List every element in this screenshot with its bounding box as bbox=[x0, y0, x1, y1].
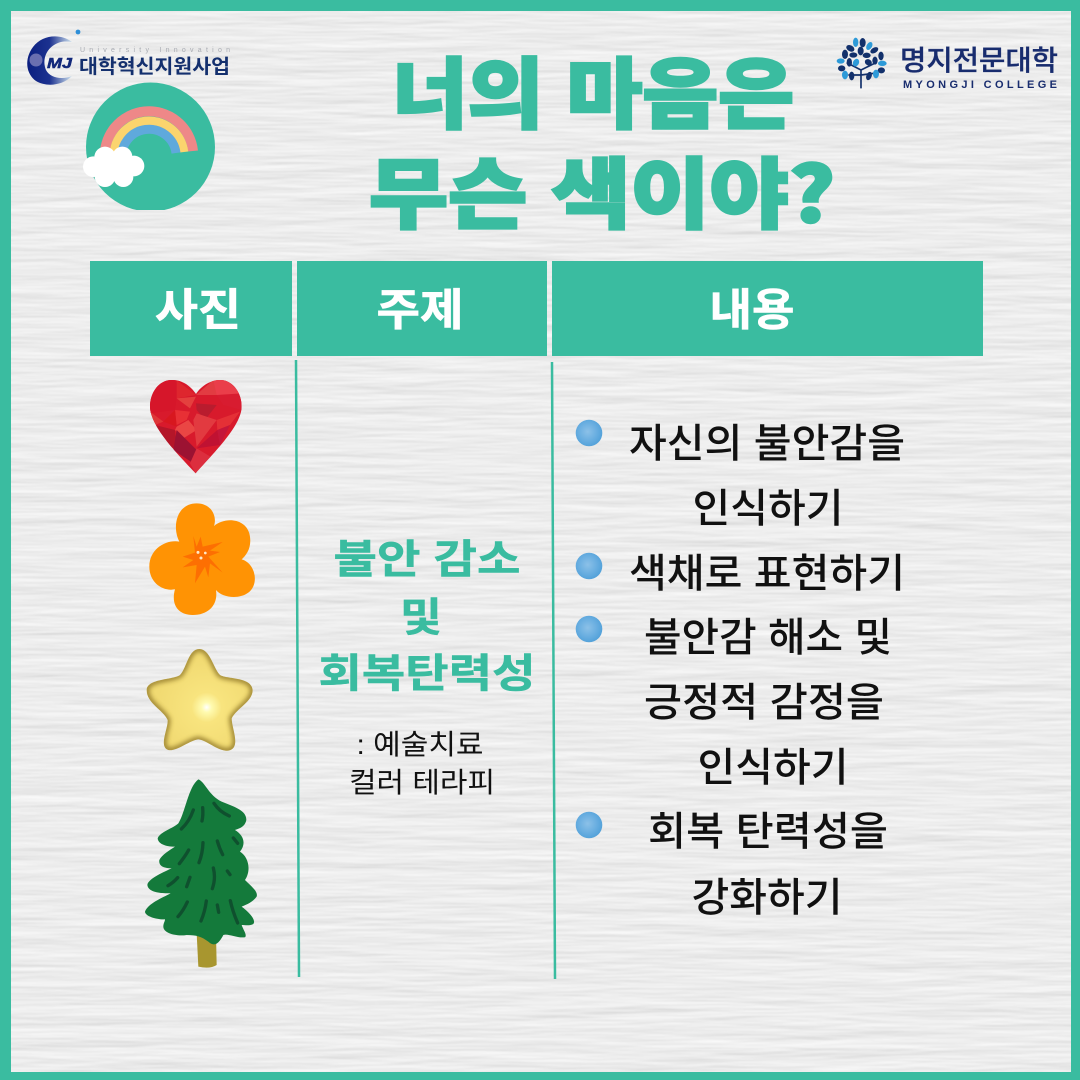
title line 1: 너의 마음은 bbox=[392, 34, 794, 145]
header cell: 내용 bbox=[552, 261, 983, 356]
topic note: : 예술치료 bbox=[356, 729, 484, 760]
icon: yellow star bbox=[147, 649, 253, 751]
icon: green tree bbox=[145, 779, 257, 968]
icon: rainbow badge bbox=[83, 82, 215, 212]
logo: Myongji College bbox=[837, 38, 1058, 91]
topic note bbox=[349, 729, 495, 798]
logo: university innovation bbox=[27, 30, 230, 85]
content text: 인식하기 bbox=[698, 746, 848, 790]
topic note: 컬러 테라피 bbox=[349, 767, 495, 798]
icon: orange flower bbox=[149, 503, 255, 615]
content text bbox=[629, 422, 905, 920]
topic heading bbox=[318, 538, 536, 696]
content text: 불안감 해소 및 bbox=[644, 616, 892, 660]
logo text: 대학혁신지원사업: 대학혁신지원사업 bbox=[79, 56, 230, 78]
topic column bbox=[318, 538, 536, 798]
content column bbox=[576, 420, 905, 920]
title line 2: 무슨 색이야? bbox=[369, 134, 835, 245]
topic heading: 불안 감소 bbox=[334, 538, 520, 582]
bullet icons bbox=[576, 420, 602, 838]
content text: 회복 탄력성을 bbox=[648, 810, 888, 854]
topic heading: 회복탄력성 bbox=[318, 652, 536, 696]
title bbox=[369, 34, 835, 245]
content text: 자신의 불안감을 bbox=[629, 422, 905, 466]
icon: red heart bbox=[150, 380, 242, 474]
logo text: University Innovation: University Innovation bbox=[80, 47, 230, 54]
icon: MJ crescent bbox=[27, 30, 80, 85]
header cell: 내용: 내용 bbox=[710, 286, 794, 335]
header cell: 주제 bbox=[297, 261, 547, 356]
logo text: 명지전문대학: 명지전문대학 bbox=[900, 45, 1058, 76]
header cell: 사진 bbox=[90, 261, 292, 356]
icon: MJ crescent: MJ bbox=[47, 55, 73, 72]
table header bbox=[90, 261, 983, 356]
header cell: 사진: 사진 bbox=[155, 286, 241, 335]
logo text: MYONGJI COLLEGE: MYONGJI COLLEGE bbox=[903, 79, 1057, 91]
content text: 강화하기 bbox=[692, 876, 842, 920]
topic heading: 및 bbox=[400, 596, 442, 640]
header cell: 주제: 주제 bbox=[376, 286, 464, 335]
icon: blue tree bbox=[837, 38, 887, 88]
photo column icons bbox=[145, 377, 257, 968]
content text: 인식하기 bbox=[692, 487, 844, 531]
content text: 긍정적 감정을 bbox=[644, 681, 884, 725]
content text: 색채로 표현하기 bbox=[629, 552, 905, 596]
